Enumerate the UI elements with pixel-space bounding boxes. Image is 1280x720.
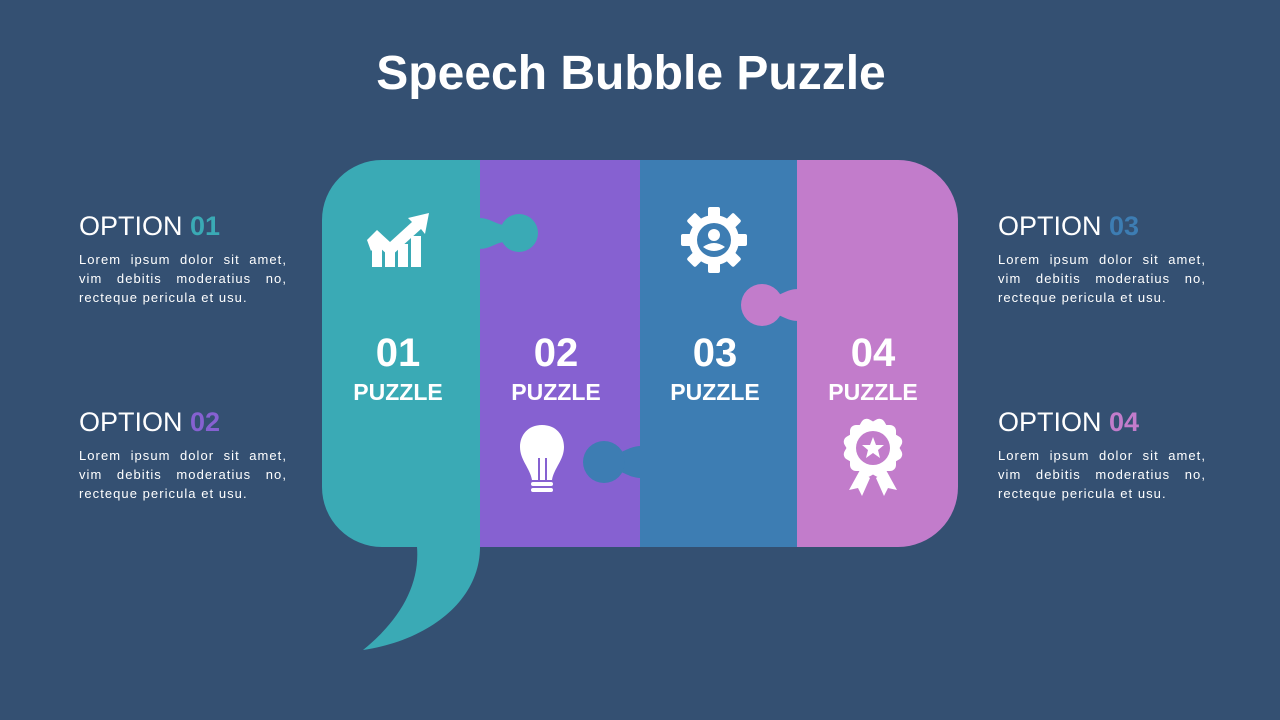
- option 01: Lorem ipsum dolor sit amet, vim debitis moderatius no, recteque pericula et usu.: [79, 252, 287, 305]
- piece labels: PUZZLE: [828, 379, 918, 405]
- tab 01: [478, 214, 538, 252]
- icon: chart: [367, 213, 429, 267]
- piece labels: PUZZLE: [353, 379, 443, 405]
- option 04: OPTION 04: [998, 407, 1139, 437]
- option 03: [998, 211, 1206, 305]
- icon: gear: [681, 207, 747, 273]
- option 04: [998, 407, 1206, 501]
- title: Speech Bubble Puzzle: [376, 47, 886, 100]
- option 03: Lorem ipsum dolor sit amet, vim debitis moderatius no, recteque pericula et usu.: [998, 252, 1206, 305]
- tab 03: [583, 441, 642, 483]
- piece labels: 01: [376, 331, 420, 375]
- option 02: Lorem ipsum dolor sit amet, vim debitis moderatius no, recteque pericula et usu.: [79, 448, 287, 501]
- piece 02: [479, 160, 641, 547]
- piece labels: 04: [851, 331, 896, 375]
- piece 03: [640, 160, 798, 547]
- piece 04: [797, 160, 958, 547]
- option 03: OPTION 03: [998, 211, 1139, 241]
- option 01: [79, 211, 287, 305]
- piece 01 with tail: [322, 160, 480, 650]
- piece labels: [353, 331, 918, 405]
- option 01: OPTION 01: [79, 211, 220, 241]
- piece labels: PUZZLE: [511, 379, 601, 405]
- option 04: Lorem ipsum dolor sit amet, vim debitis moderatius no, recteque pericula et usu.: [998, 448, 1206, 501]
- icon: award: [842, 417, 904, 496]
- option 02: [79, 407, 287, 501]
- piece labels: 02: [534, 331, 578, 375]
- option 02: OPTION 02: [79, 407, 220, 437]
- piece labels: PUZZLE: [670, 379, 760, 405]
- piece labels: 03: [693, 331, 737, 375]
- tab 04: [741, 284, 799, 326]
- icon: lightbulb: [520, 425, 564, 492]
